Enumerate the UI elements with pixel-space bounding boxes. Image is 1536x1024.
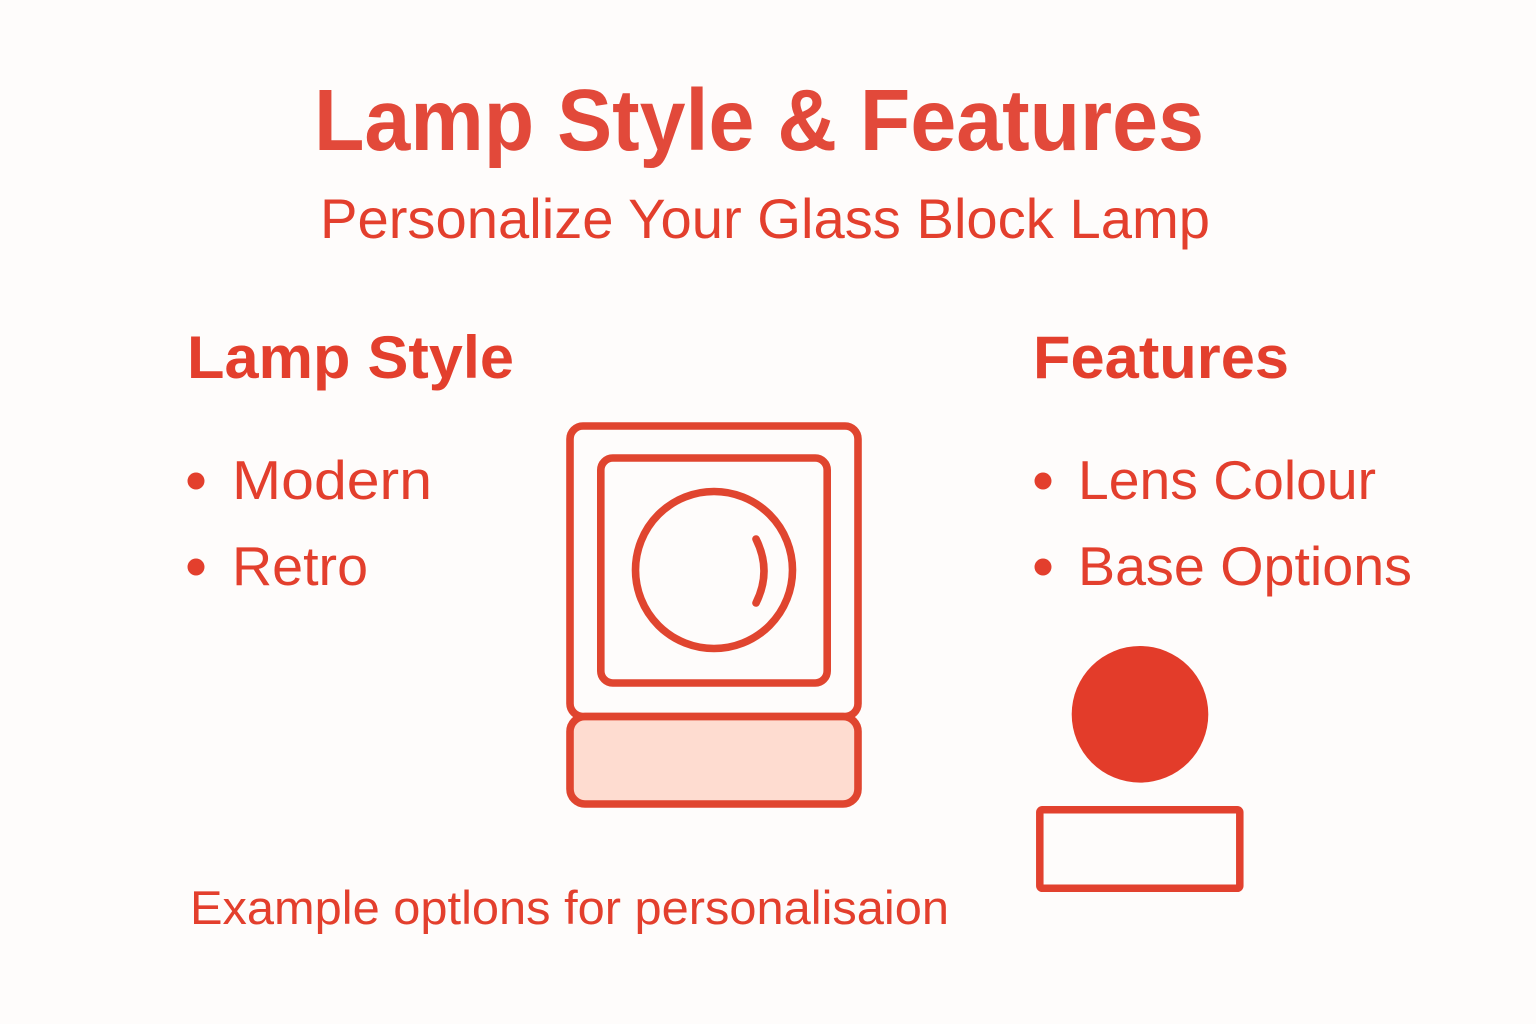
panel: lamp style list xyxy=(187,324,514,597)
list item: modern: Modern xyxy=(232,449,432,511)
caption: Example optlons for personalisaion xyxy=(190,881,949,934)
lens circle xyxy=(636,492,792,648)
icon: lens colour swatch xyxy=(1072,646,1208,783)
icon: base option swatch xyxy=(1040,810,1240,888)
lamp base xyxy=(570,716,858,804)
list item: lens colour: Lens Colour xyxy=(1078,449,1376,511)
icon: glass block lamp xyxy=(570,426,858,804)
heading: features: Features xyxy=(1033,324,1289,391)
outer glass block xyxy=(570,426,858,716)
inner frame xyxy=(601,458,827,683)
list item: base options: Base Options xyxy=(1078,535,1412,597)
panel: features list xyxy=(1033,324,1412,597)
list item: retro: Retro xyxy=(232,535,368,597)
subtitle: Personalize Your Glass Block Lamp xyxy=(320,187,1210,250)
title: Lamp Style & Features xyxy=(314,72,1204,169)
lens highlight xyxy=(756,539,764,603)
heading: lamp style: Lamp Style xyxy=(187,324,514,391)
